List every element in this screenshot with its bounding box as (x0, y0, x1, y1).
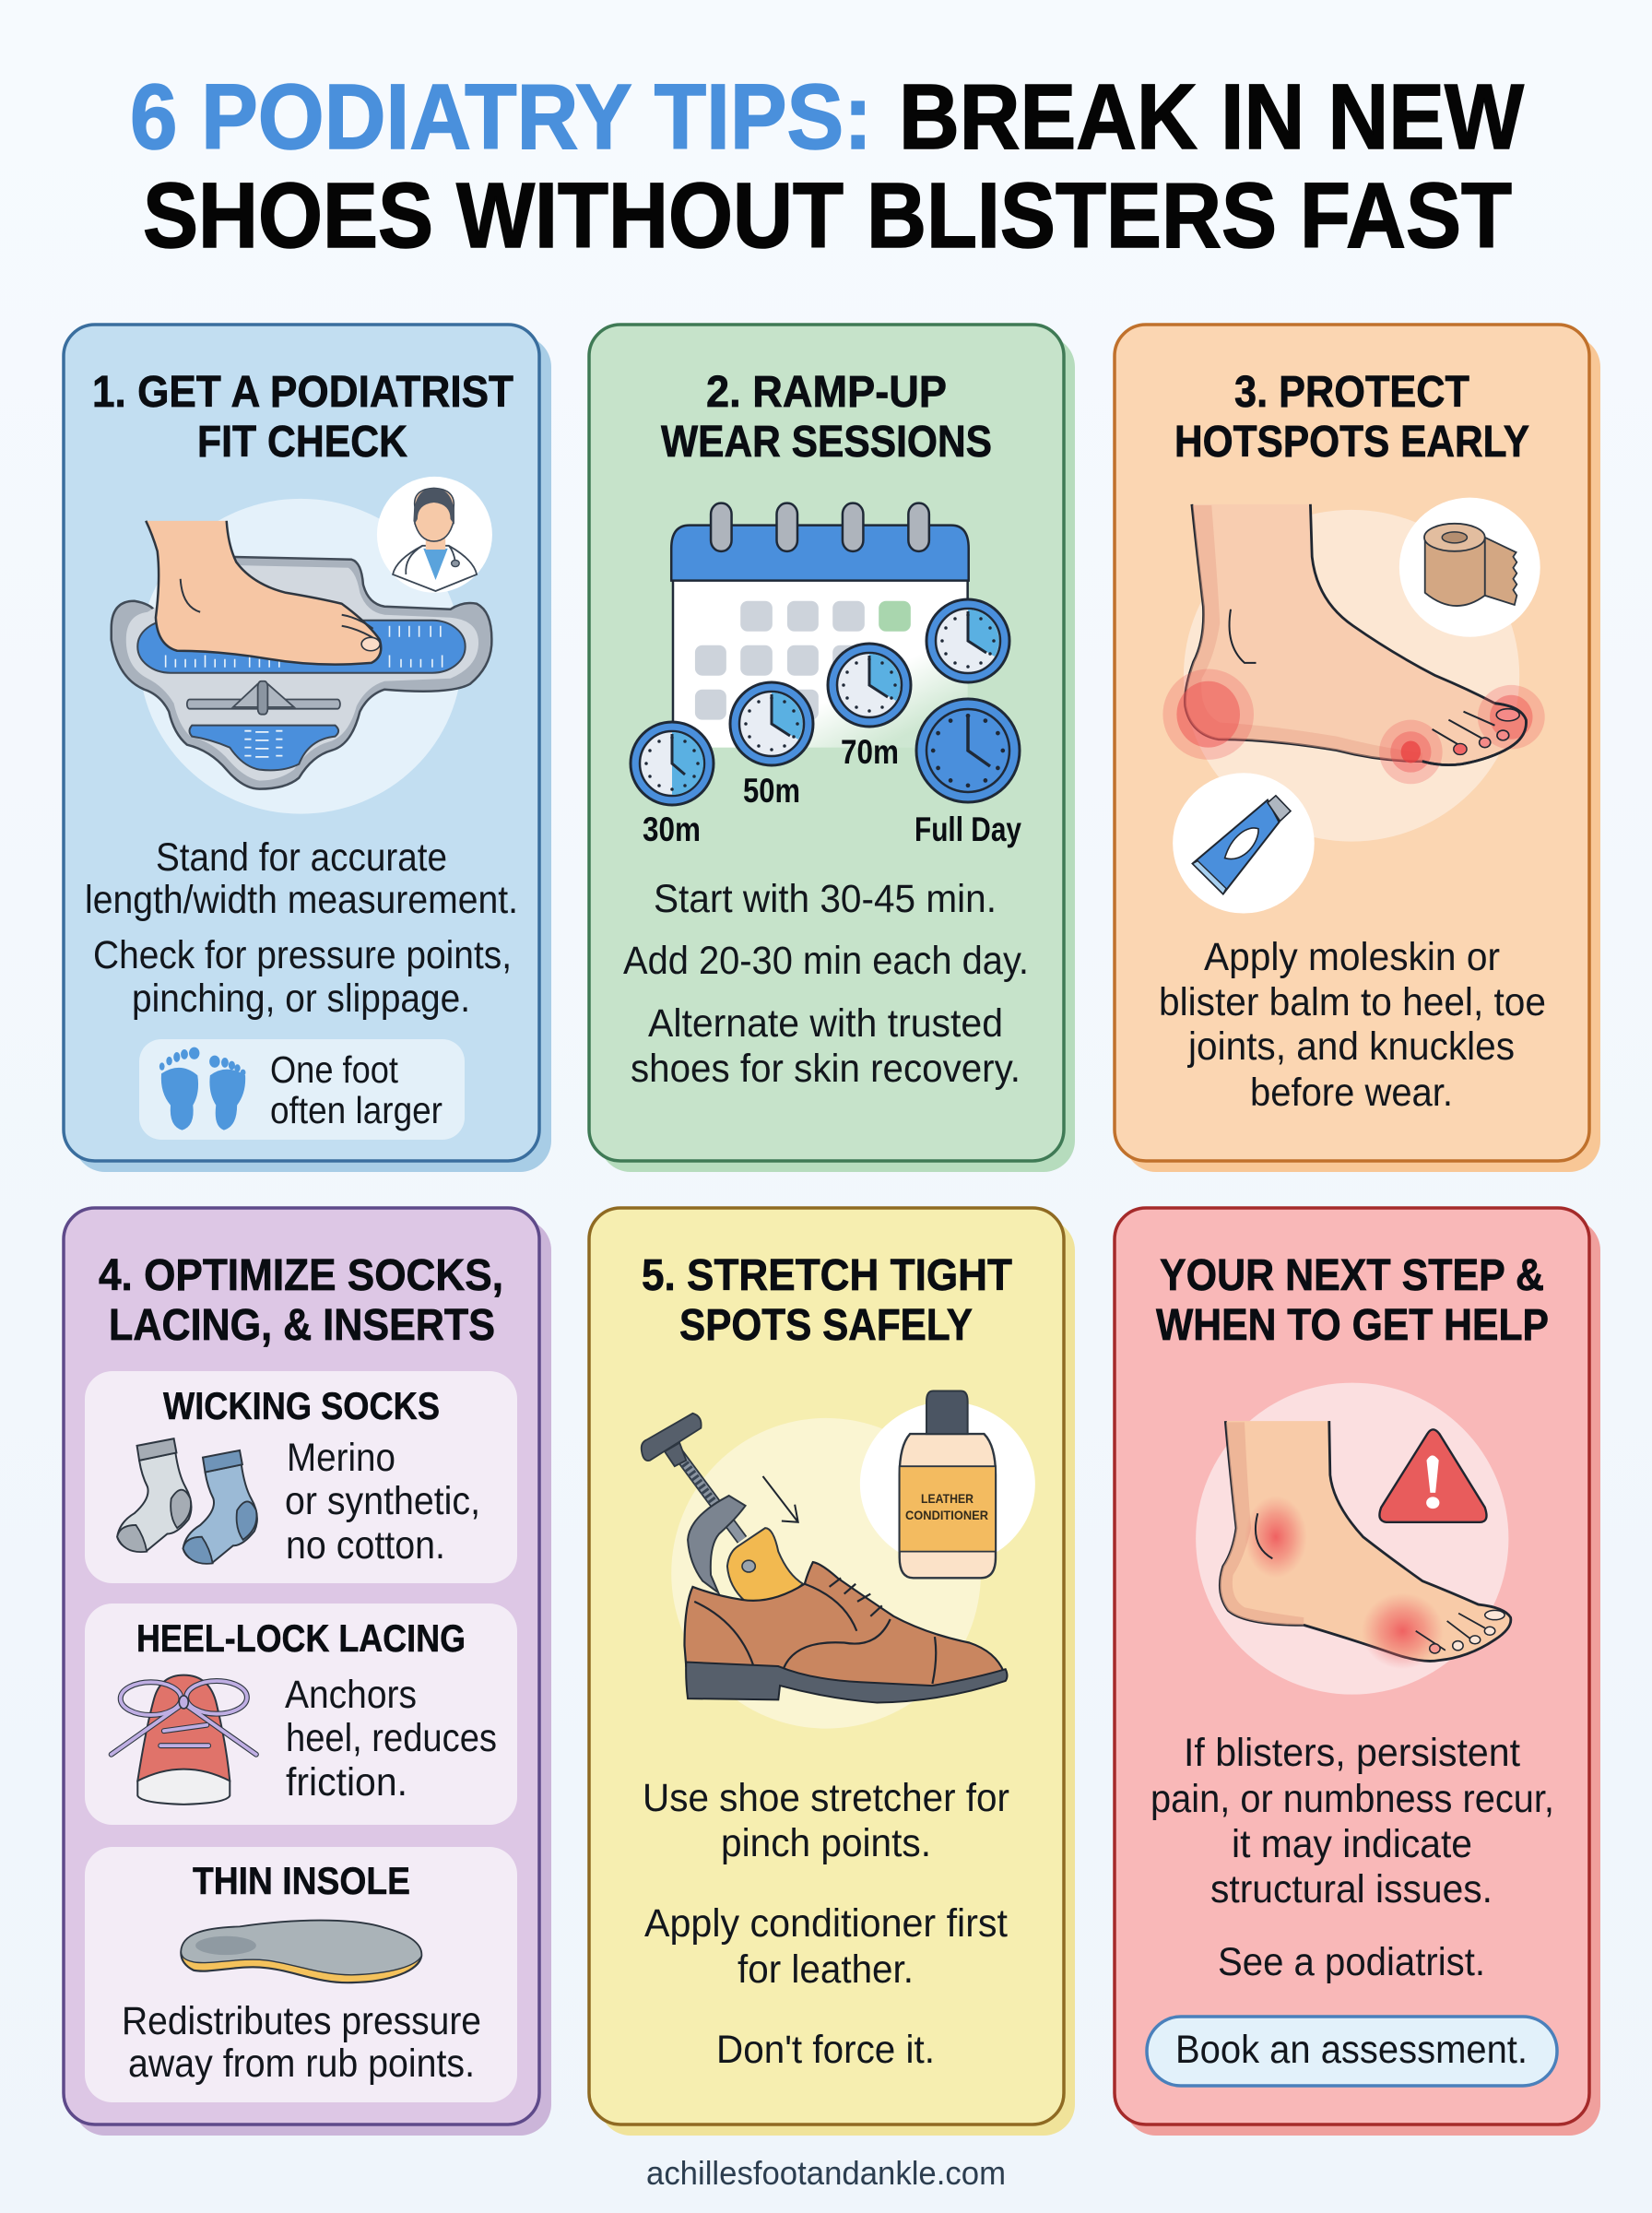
body text: If blisters, persistent (1184, 1731, 1520, 1775)
body text (1159, 935, 1546, 1115)
title: BREAK IN NEW (899, 65, 1525, 169)
heading: 1. GET A PODIATRIST (92, 368, 513, 417)
callout: one foot often larger (139, 1039, 465, 1140)
heading: LACING, & INSERTS (109, 1301, 495, 1350)
icon: clock 70m (828, 644, 911, 727)
body text: Check for pressure points, (93, 933, 512, 977)
body text: Use shoe stretcher for (643, 1776, 1009, 1820)
icon: footprints (159, 1047, 245, 1130)
clock labels: 50m (743, 772, 800, 810)
body text: Start with 30-45 min. (654, 877, 997, 921)
icon: blister balm tube (1173, 773, 1315, 914)
button: book an assessment (1147, 2017, 1557, 2086)
illustration: shoe and stretcher (642, 1414, 1007, 1729)
icon: doctor (377, 477, 492, 593)
sub-panel: wicking socks: or synthetic, (285, 1479, 480, 1523)
heading (99, 1251, 503, 1350)
panel: 1 podiatrist fit check (64, 325, 551, 1172)
icon: clock 50m (730, 682, 813, 765)
heading (1174, 368, 1529, 467)
sub-panel: heel-lock lacing: friction. (286, 1760, 407, 1805)
clock labels: Full Day (914, 811, 1021, 848)
body text: Add 20-30 min each day. (623, 939, 1029, 983)
body text: Don't force it. (716, 2028, 935, 2072)
icon: moleskin tape (1399, 498, 1540, 637)
sub-panel: wicking socks: WICKING SOCKS (163, 1384, 440, 1427)
body text: length/width measurement. (85, 878, 518, 922)
icon: leather conditioner bottle (860, 1391, 1035, 1578)
heading: FIT CHECK (197, 418, 407, 467)
sub-panel: thin insole: away from rub points. (128, 2041, 475, 2086)
body text: Alternate with trusted (648, 1001, 1003, 1046)
body text: Apply conditioner first (644, 1901, 1008, 1946)
body text (1150, 1731, 1554, 1984)
panel: 2 ramp-up wear sessions (589, 325, 1075, 1172)
body text: blister balm to heel, toe (1159, 980, 1546, 1024)
body text (623, 877, 1029, 1091)
icon: calendar (671, 503, 969, 748)
body text: structural issues. (1210, 1867, 1493, 1911)
button: book an assessment: Book an assessment. (1175, 2028, 1528, 2072)
title (130, 65, 1525, 267)
body text: See a podiatrist. (1218, 1940, 1485, 1984)
body text: for leather. (738, 1947, 914, 1992)
panel: 5 stretch tight spots (589, 1208, 1075, 2136)
icon: clock 30m (631, 722, 714, 805)
icon: laced sneaker (112, 1675, 256, 1805)
heading (92, 368, 513, 467)
panel: 4 optimize socks, lacing, inserts (64, 1208, 551, 2136)
body text: shoes for skin recovery. (631, 1047, 1021, 1091)
icon: clock full day (916, 699, 1020, 802)
sub-panel: heel-lock lacing: Anchors (285, 1673, 417, 1717)
sub-panel: wicking socks (85, 1371, 517, 1583)
sub-panel: thin insole: THIN INSOLE (193, 1859, 410, 1902)
body text: pinch points. (721, 1821, 931, 1865)
illustration: foot on measuring device (112, 499, 491, 814)
body text: Stand for accurate (156, 835, 447, 880)
icon: insole (181, 1921, 421, 1982)
body text: pinching, or slippage. (132, 976, 470, 1021)
clock labels (643, 733, 1021, 848)
icon: leather conditioner bottle: CONDITIONER (905, 1508, 988, 1522)
body text: Apply moleskin or (1204, 935, 1500, 979)
body text (85, 835, 518, 1021)
body text: pain, or numbness recur, (1150, 1777, 1554, 1821)
panel: 3 protect hotspots early (1115, 325, 1600, 1172)
title: SHOES WITHOUT BLISTERS FAST (143, 164, 1512, 267)
heading: 3. PROTECT (1234, 368, 1469, 417)
clock labels: 30m (643, 811, 701, 848)
heading (661, 368, 992, 467)
heading (1156, 1251, 1549, 1350)
body text (643, 1776, 1009, 2072)
sub-panel: heel-lock lacing: HEEL-LOCK LACING (136, 1616, 466, 1660)
heading: HOTSPOTS EARLY (1174, 418, 1529, 467)
title: 6 PODIATRY TIPS: (130, 65, 872, 169)
icon: warning triangle (1379, 1429, 1486, 1522)
panel: next step and when to get help (1115, 1208, 1600, 2136)
clock labels: 70m (841, 733, 899, 771)
body text: before wear. (1250, 1071, 1453, 1115)
illustration: painful foot (1196, 1383, 1511, 1695)
sub-panel: heel-lock lacing (85, 1604, 517, 1825)
sub-panel: thin insole: Redistributes pressure (122, 1999, 481, 2043)
icon: leather conditioner bottle: LEATHER (921, 1491, 974, 1506)
sub-panel: thin insole (85, 1847, 517, 2102)
heading: YOUR NEXT STEP & (1160, 1251, 1544, 1300)
sub-panel: heel-lock lacing: heel, reduces (286, 1716, 497, 1760)
body text: joints, and knuckles (1186, 1024, 1515, 1069)
heading: 2. RAMP-UP (706, 368, 947, 417)
sub-panel: wicking socks: Merino (287, 1436, 395, 1480)
body text: it may indicate (1232, 1822, 1472, 1866)
heading: SPOTS SAFELY (679, 1301, 973, 1350)
heading: 4. OPTIMIZE SOCKS, (99, 1251, 503, 1300)
heading: WHEN TO GET HELP (1156, 1301, 1549, 1350)
sub-panel: wicking socks: no cotton. (286, 1523, 445, 1568)
heading: WEAR SESSIONS (661, 418, 992, 467)
heading (642, 1251, 1012, 1350)
callout: one foot often larger: often larger (270, 1089, 442, 1131)
icon: clock top right (926, 599, 1009, 682)
callout: one foot often larger: One foot (270, 1048, 399, 1091)
illustration: foot with hotspots (1162, 504, 1545, 842)
footer url: achillesfootandankle.com (646, 2154, 1006, 2192)
heading: 5. STRETCH TIGHT (642, 1251, 1012, 1300)
icon: socks (117, 1438, 257, 1564)
